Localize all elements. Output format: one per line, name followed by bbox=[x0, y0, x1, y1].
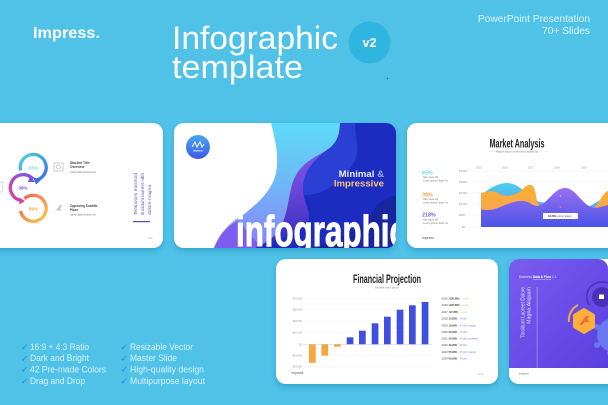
text block: opposing subtitle: Lorem dolor sit amet elit bbox=[70, 214, 96, 216]
brand logo: Impress.: Impress. bbox=[33, 25, 100, 42]
legend: 2019 19,865 – Profit margin bbox=[442, 323, 476, 327]
speck bbox=[387, 78, 388, 79]
version badge: v2 bbox=[363, 36, 376, 50]
icon: orange gear with plane bbox=[569, 305, 594, 333]
feature list: ✓ bbox=[120, 377, 128, 387]
bar chart: $25,000 bbox=[293, 319, 303, 323]
icon: logo badge bbox=[186, 135, 210, 159]
feature list: ✓ bbox=[120, 354, 128, 364]
feature list: Resizable Vector bbox=[130, 342, 193, 352]
area chart: $1,000 bbox=[459, 202, 467, 206]
text block: stacked title overview: Stacked Title bbox=[70, 161, 90, 165]
cover tagline: Impressive bbox=[334, 178, 384, 190]
feature list: High-quality design bbox=[130, 364, 204, 374]
stats: Lorem ipsum dolor sit bbox=[423, 200, 448, 204]
stats: 39% bbox=[422, 192, 433, 198]
text block: stacked title overview: Lorem dolor sit amet elit bbox=[70, 171, 96, 174]
legend: 2020 30,865 – Profit bbox=[442, 330, 467, 334]
legend: 2021 40,865 – Profit increase bbox=[442, 337, 478, 341]
area chart: $4,569 Lorem ipsum bbox=[548, 214, 572, 218]
feature list: Master Slide bbox=[130, 353, 177, 363]
ring chart: 65% bbox=[29, 166, 38, 170]
feature list: Multipurpose layout bbox=[130, 376, 205, 386]
text block: opposing subtitle: Opposing Subtitle bbox=[70, 204, 98, 208]
bar chart: -$25,000 bbox=[292, 365, 303, 369]
ring chart bbox=[10, 154, 46, 221]
stats: Nam quis elit bbox=[423, 218, 438, 222]
stats: Nam quis elit bbox=[423, 197, 438, 201]
icon: blue gear bbox=[594, 319, 608, 356]
slide label: Business Data & Flow 1.1 bbox=[519, 275, 557, 279]
title: template bbox=[172, 49, 303, 85]
stats bbox=[422, 170, 448, 225]
wave layers bbox=[174, 123, 396, 248]
feature list bbox=[21, 342, 205, 387]
feature list: 16:9 + 4:3 Ratio bbox=[30, 342, 89, 352]
ring chart: 38% bbox=[18, 186, 28, 190]
text block: opposing subtitle bbox=[70, 204, 98, 216]
footer: 012 bbox=[479, 372, 484, 376]
footer bbox=[292, 371, 484, 376]
legend: 2015 -$30,865 – Loss bbox=[442, 296, 469, 300]
footer: impress bbox=[292, 371, 304, 375]
icon: logo badge: impress bbox=[193, 148, 204, 152]
stats: Lorem ipsum dolor sit bbox=[423, 221, 448, 225]
subtitle: 70+ Slides bbox=[542, 26, 590, 37]
feature list: ✓ bbox=[21, 377, 29, 387]
legend: 2017 -$7,865 – Loss bbox=[442, 310, 468, 314]
area chart: $2,000 bbox=[459, 191, 467, 195]
panel: ring diagram slide: 011 bbox=[148, 236, 153, 240]
title bbox=[172, 20, 338, 85]
vertical text: Tempotory euismod bbox=[133, 173, 139, 215]
feature list: ✓ bbox=[120, 366, 128, 376]
vertical text: tincidunt laoreet nibh bbox=[140, 173, 146, 215]
vertical text: dolore magna bbox=[147, 185, 153, 215]
footer: impress bbox=[519, 372, 529, 376]
stats: Nam quis elit bbox=[423, 175, 438, 179]
bar chart: $10,000 bbox=[293, 330, 303, 334]
stats: 218% bbox=[422, 212, 436, 218]
panel: data flow slide bbox=[509, 259, 608, 384]
area chart: 2018 bbox=[554, 166, 560, 170]
legend: 2022 49,865 – Profit bbox=[442, 343, 467, 347]
ring chart: 89% bbox=[29, 206, 38, 212]
subheading: Facilisis lorem ipsum bbox=[375, 286, 399, 290]
legend: 2016 -$20,865 – Loss bbox=[442, 303, 469, 307]
text block: opposing subtitle: Place bbox=[70, 208, 79, 212]
panel: ring diagram slide bbox=[0, 123, 163, 248]
cover tagline bbox=[334, 169, 384, 190]
bar chart: $75,000 bbox=[293, 296, 303, 300]
big word: infographic bbox=[236, 207, 407, 256]
area chart: $3,000 bbox=[459, 180, 467, 184]
panel: cover slide bbox=[174, 123, 407, 256]
feature list: ✓ bbox=[120, 343, 128, 353]
vertical text bbox=[133, 173, 153, 215]
area chart: $0 bbox=[462, 225, 465, 229]
panel: market analysis slide bbox=[407, 123, 608, 248]
stats: Lorem ipsum dolor sit bbox=[423, 178, 448, 182]
feature list: Dark and Bright bbox=[30, 353, 89, 363]
bar chart: $50,000 bbox=[293, 308, 303, 312]
area chart: 2017 bbox=[528, 166, 534, 170]
subheading: Magna aliqua consectetur adipiscing bbox=[496, 150, 539, 154]
text block: stacked title overview bbox=[70, 161, 96, 174]
legend bbox=[442, 296, 478, 361]
area chart: 2015 bbox=[476, 166, 482, 170]
area chart: 2016 bbox=[502, 166, 508, 170]
feature list: Drag and Drop bbox=[30, 376, 85, 386]
icon: plane bbox=[54, 205, 62, 213]
area chart bbox=[459, 166, 608, 229]
version badge bbox=[348, 22, 390, 64]
legend: 2018 10,865 – Profit bbox=[442, 316, 467, 320]
panel: financial projection slide bbox=[276, 259, 498, 384]
vertical text bbox=[520, 287, 532, 338]
stats: 65% bbox=[422, 170, 433, 176]
feature list: 42 Pre-made Colors bbox=[30, 364, 106, 374]
vertical text: Tincidunt Laoreet Dolore bbox=[520, 287, 526, 338]
bar chart bbox=[292, 296, 432, 369]
heading: Financial Projection bbox=[353, 272, 421, 286]
icon: camera bbox=[54, 163, 63, 171]
legend: 2024 60,865 – Profit bbox=[442, 357, 467, 361]
icon: dark gear ring bbox=[587, 282, 608, 307]
area chart: 2019 bbox=[581, 166, 587, 170]
subtitle: PowerPoint Presentation bbox=[478, 14, 590, 25]
cut-off left icon bbox=[0, 182, 3, 192]
heading: Market Analysis bbox=[490, 136, 545, 150]
text block: stacked title overview: Overview bbox=[70, 165, 85, 169]
bar chart: -$10,000 bbox=[292, 353, 303, 357]
title: Infographic bbox=[172, 20, 338, 56]
vertical text: Magna Aliquam bbox=[526, 287, 532, 324]
footer logo: impress bbox=[422, 236, 434, 240]
subtitle bbox=[478, 14, 590, 37]
subheading bbox=[488, 150, 548, 154]
area chart: $500 bbox=[459, 213, 465, 217]
cover tagline: Minimal & bbox=[339, 169, 384, 180]
legend: 2023 55,865 – Profit margin bbox=[442, 350, 476, 354]
feature list: ✓ bbox=[21, 354, 29, 364]
feature list: ✓ bbox=[21, 343, 29, 353]
bar chart: $0 bbox=[299, 342, 303, 346]
area chart: $4,000 bbox=[459, 169, 467, 173]
feature list: ✓ bbox=[21, 366, 29, 376]
